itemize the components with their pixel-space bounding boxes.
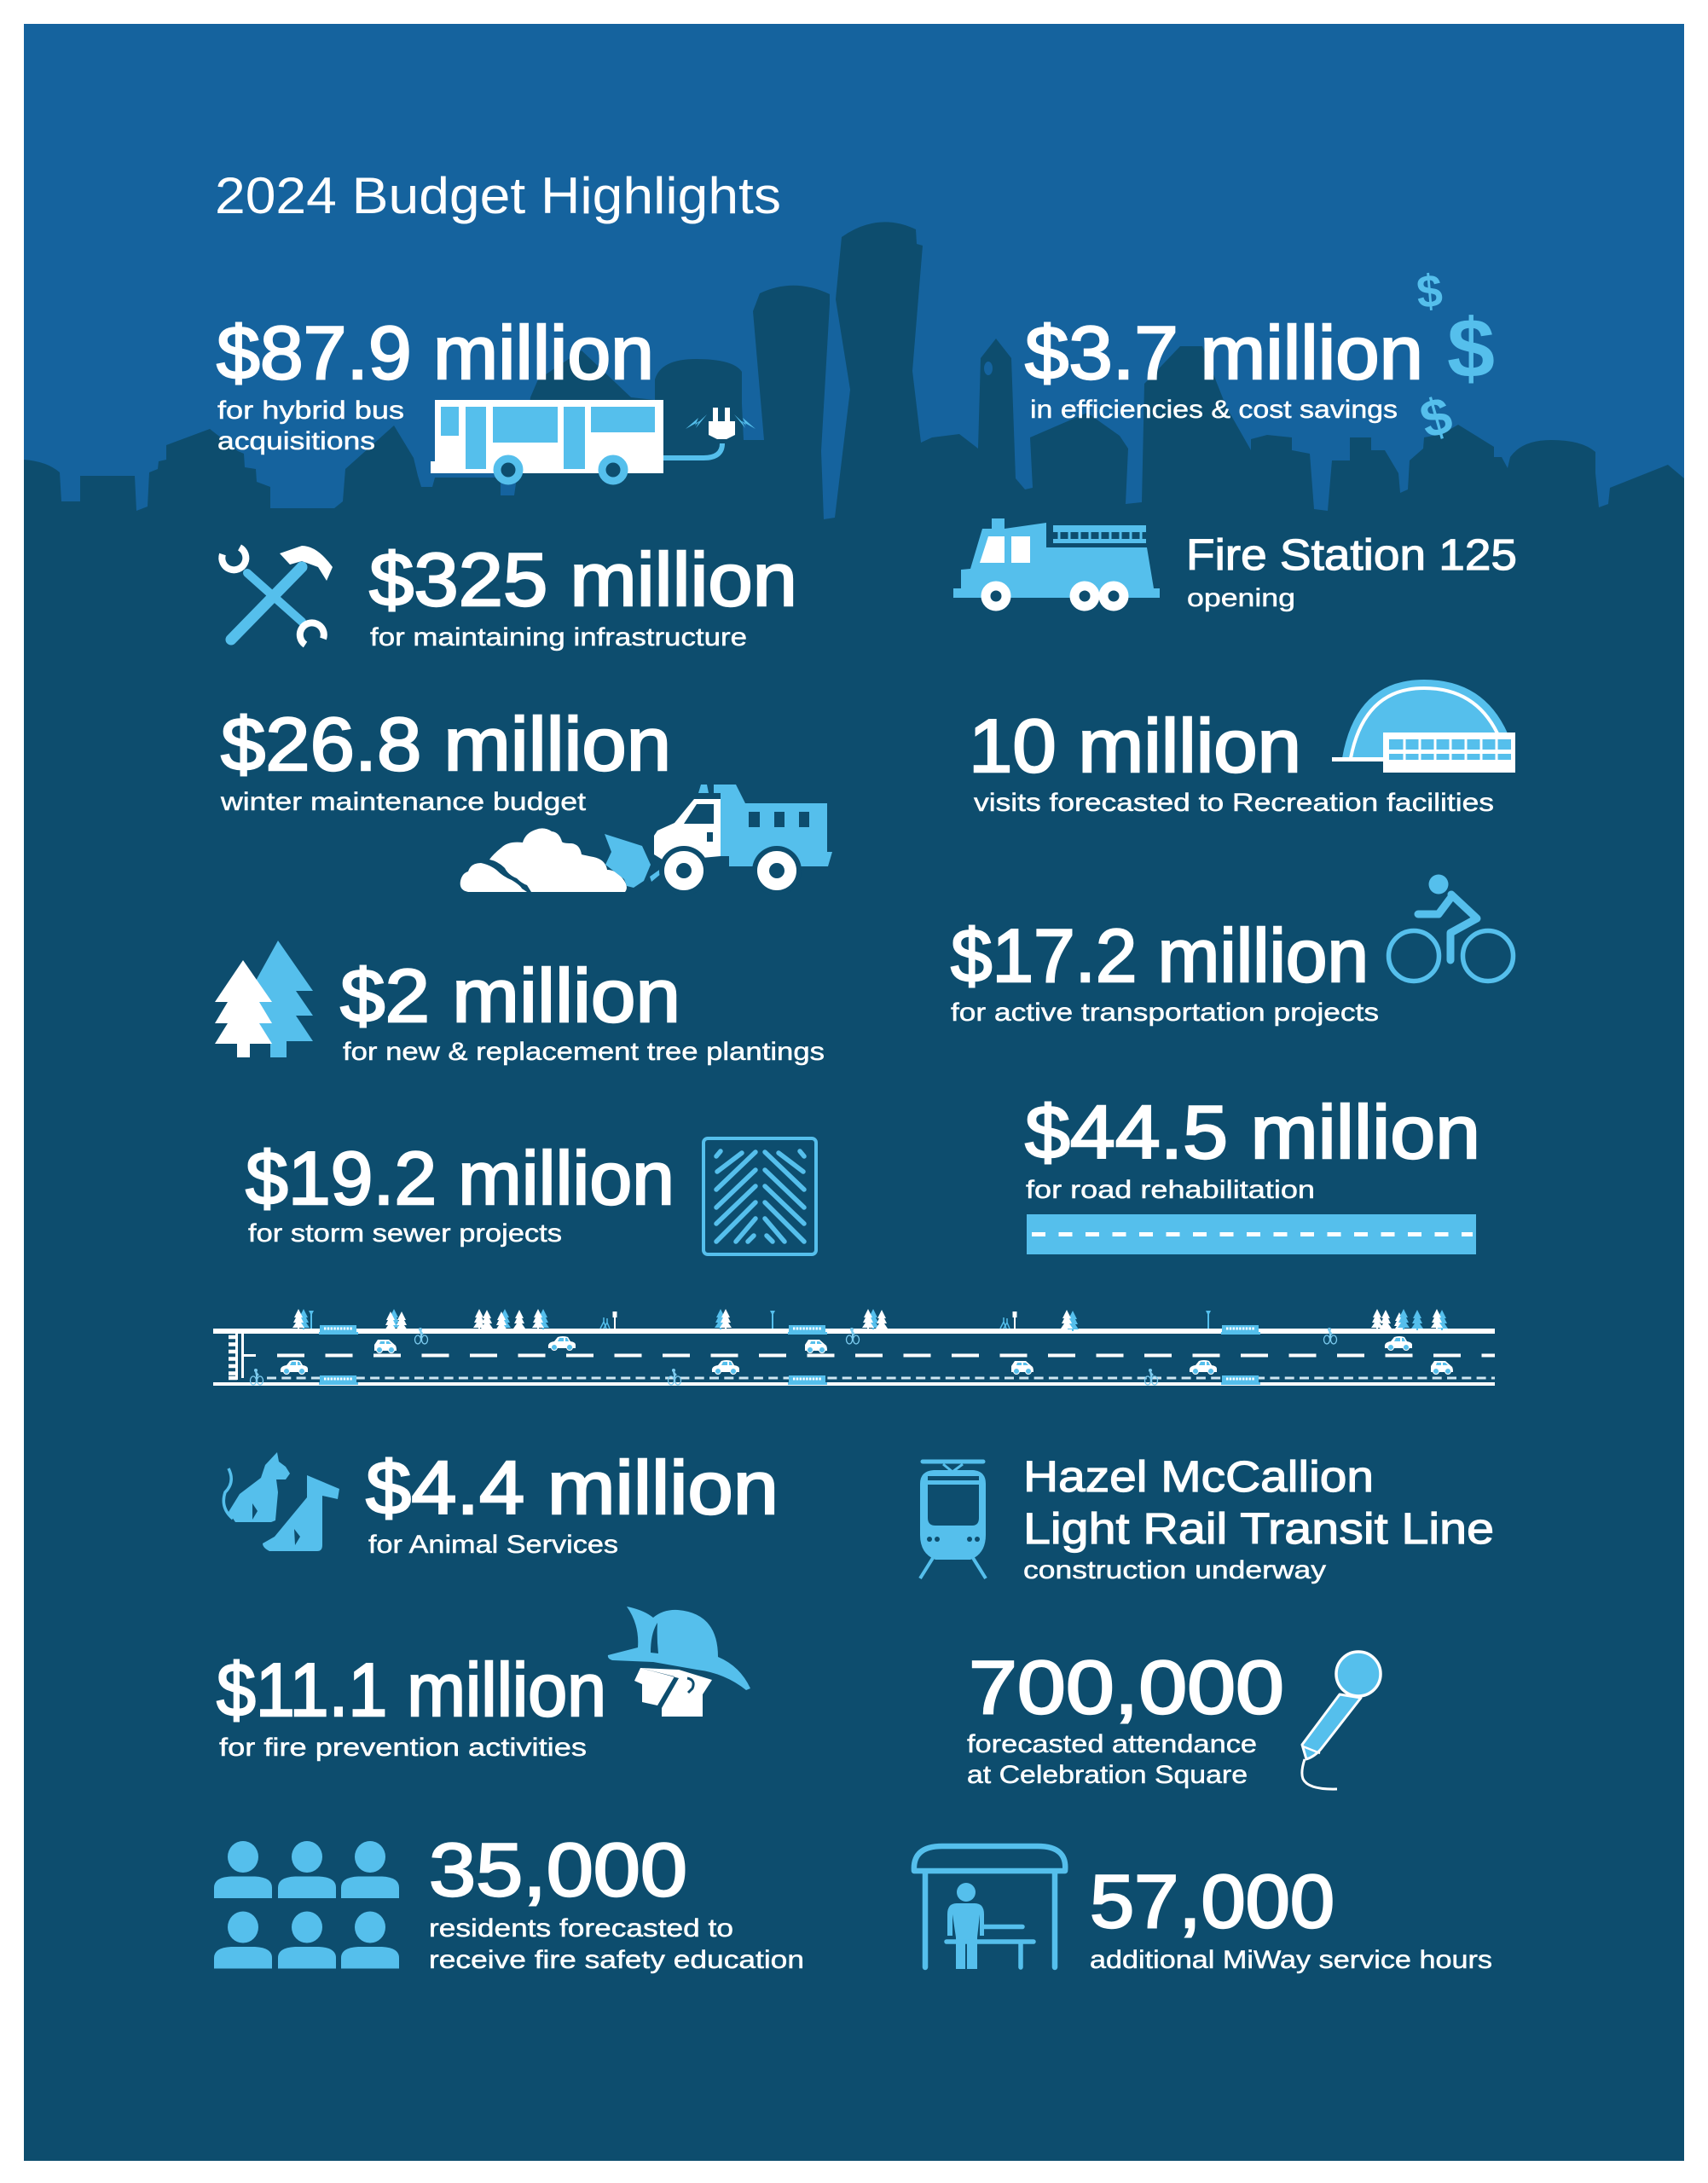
caption: for hybrid bus (217, 397, 404, 425)
item: $11.1 million fire prevention (217, 1607, 750, 1762)
caption line 2: acquisitions (217, 427, 375, 455)
figure: $2 million (340, 953, 680, 1038)
item: Fire Station 125 (953, 518, 1517, 612)
figure: $3.7 million (1025, 310, 1423, 395)
icon: microphone (1302, 1652, 1381, 1789)
figure: $4.4 million (366, 1445, 779, 1530)
caption line 1: forecasted attendance (967, 1730, 1257, 1758)
icon: small dollar bottom: $ (1414, 385, 1458, 450)
caption: for storm sewer projects (248, 1219, 562, 1248)
caption: for Animal Services (368, 1531, 618, 1559)
icon: bus shelter (914, 1846, 1065, 1969)
figure: $87.9 million (217, 310, 654, 395)
icon: cyclist (1388, 875, 1513, 981)
icon: storm grate (703, 1138, 816, 1254)
icon: hybrid bus with plug (431, 400, 756, 481)
item: 10 million recreation visits (969, 680, 1515, 817)
item: $3.7 million efficiencies (1025, 265, 1495, 450)
icon: cat and dog (223, 1452, 339, 1551)
figure: $44.5 million (1025, 1090, 1480, 1174)
caption: for road rehabilitation (1026, 1176, 1315, 1204)
item: 57,000 MiWay hours (914, 1846, 1492, 1974)
icon: road strip (1027, 1214, 1476, 1254)
item: $17.2 million active transportation (951, 875, 1513, 1027)
item: 35,000 fire safety education (214, 1827, 804, 1974)
figure: $11.1 million (217, 1647, 606, 1732)
figure: 57,000 (1090, 1859, 1335, 1943)
figure: 10 million (969, 704, 1301, 788)
icon: pine trees (215, 941, 313, 1057)
icon: fire truck (953, 518, 1160, 606)
caption: opening (1187, 584, 1295, 612)
caption: for fire prevention activities (219, 1734, 587, 1762)
item: $26.8 million winter maintenance (220, 702, 832, 895)
road cross-section illustration (213, 1309, 1495, 1386)
caption line 2: receive fire safety education (429, 1946, 804, 1974)
icon: small dollar top: $ (1415, 265, 1445, 318)
caption line 2: at Celebration Square (967, 1761, 1248, 1789)
icon: firefighter helmet (608, 1607, 750, 1717)
caption: for maintaining infrastructure (370, 623, 747, 651)
item: 700,000 attendance (967, 1645, 1381, 1789)
figure: 700,000 (969, 1645, 1284, 1729)
caption line 1: residents forecasted to (429, 1914, 733, 1943)
figure: $325 million (369, 537, 797, 622)
caption: additional MiWay service hours (1090, 1946, 1492, 1974)
caption: construction underway (1023, 1556, 1326, 1584)
figure: $26.8 million (221, 702, 671, 786)
item: Hazel McCallion LRT (920, 1452, 1494, 1584)
icon: group of people (214, 1841, 399, 1968)
heading line 1: Hazel McCallion (1023, 1452, 1374, 1501)
title: 2024 Budget Highlights (215, 167, 781, 224)
heading line 2: Light Rail Transit Line (1023, 1504, 1494, 1553)
icon: large dollar: $ (1447, 301, 1495, 395)
figure: $19.2 million (246, 1136, 675, 1220)
caption: winter maintenance budget (220, 788, 587, 816)
caption: visits forecasted to Recreation facilities (974, 789, 1494, 817)
icon: snow plough and snow (460, 785, 832, 895)
item: $4.4 million animal services (223, 1445, 779, 1559)
caption: for new & replacement tree plantings (343, 1038, 825, 1066)
item: $325 million infrastructure (222, 537, 797, 651)
item: $87.9 million hybrid buses (217, 310, 756, 481)
figure: 35,000 (429, 1827, 687, 1912)
icon: recreation dome (1332, 680, 1515, 773)
figure: $17.2 million (951, 913, 1369, 998)
icon: light rail train (920, 1462, 986, 1578)
caption: for active transportation projects (951, 999, 1379, 1027)
caption: in efficiencies & cost savings (1030, 396, 1398, 424)
icon: crossed hammer and wrench (222, 546, 333, 645)
item: $44.5 million road rehabilitation (1025, 1090, 1480, 1254)
item: $2 million trees (215, 941, 825, 1066)
item: $19.2 million storm sewers (246, 1136, 816, 1254)
heading: Fire Station 125 (1186, 530, 1517, 579)
